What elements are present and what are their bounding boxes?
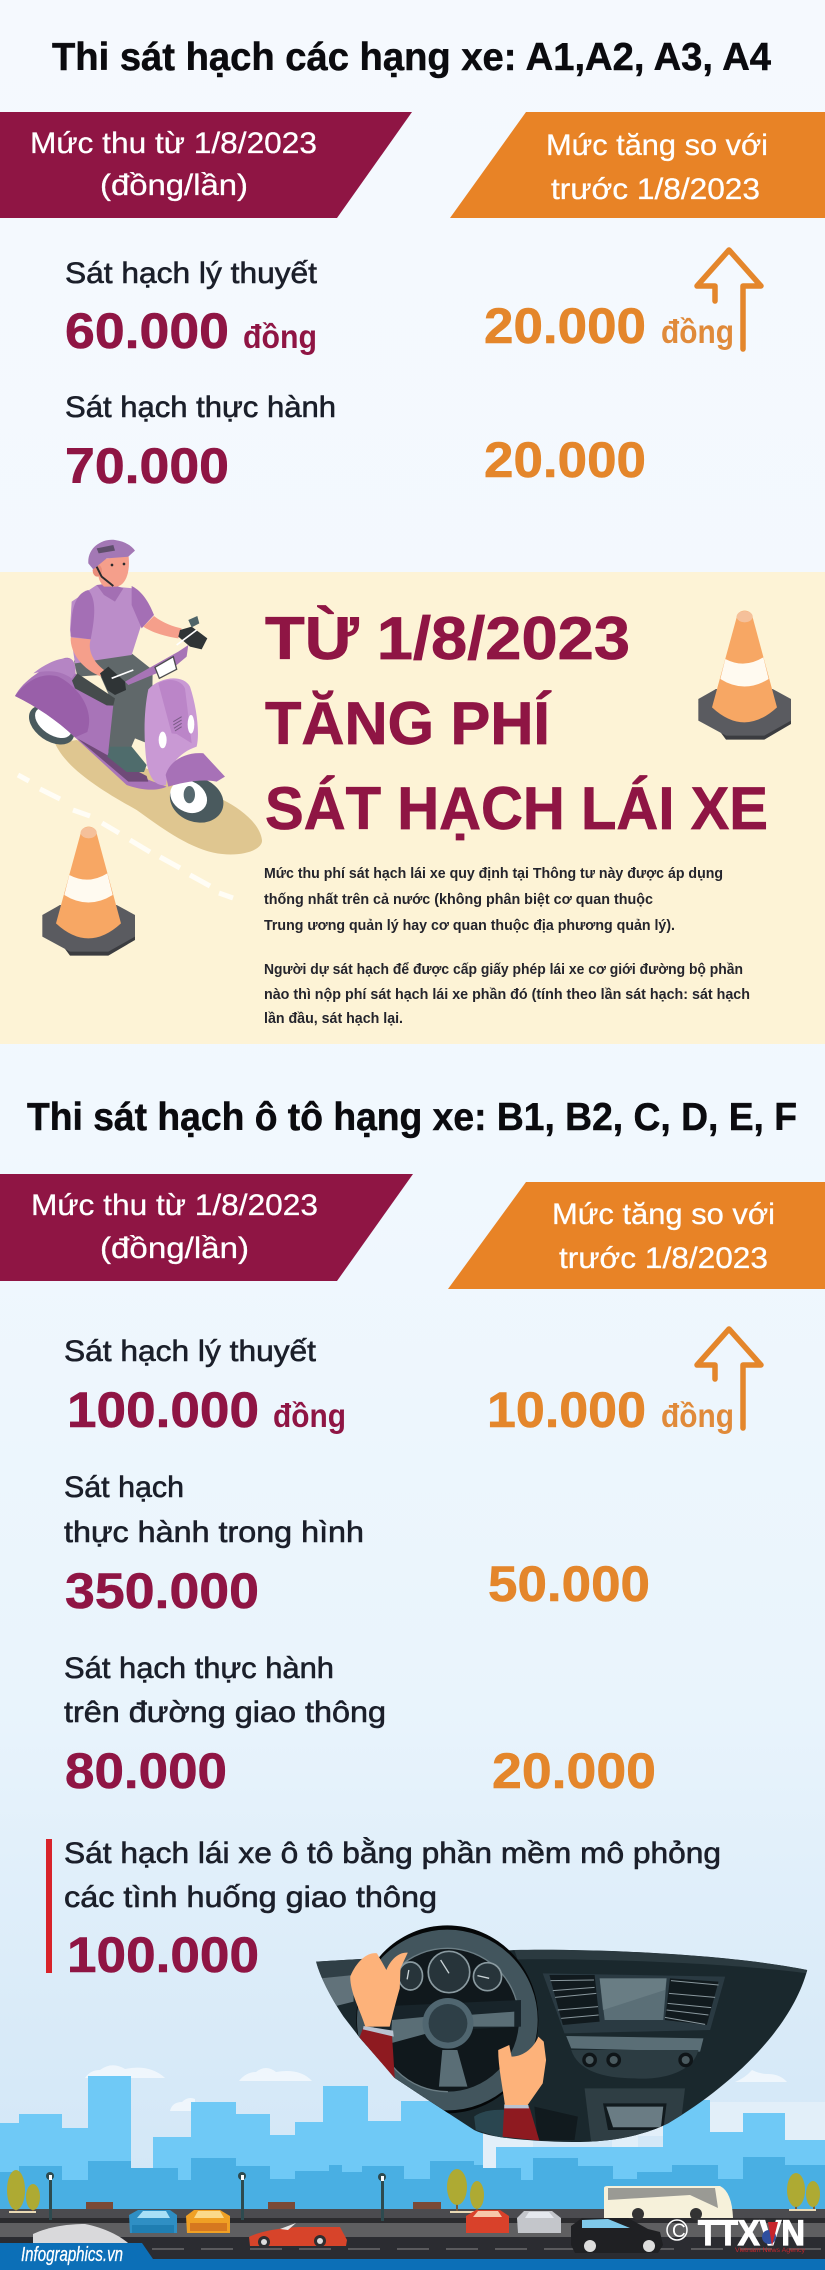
right arm and hand xyxy=(498,2037,546,2141)
headline: from 1/8/2023 raise driving test fee: TĂNG PHÍ xyxy=(265,690,551,757)
text block: fee note: lần đầu, sát hạch lại. xyxy=(264,1010,403,1027)
headline: from 1/8/2023 raise driving test fee xyxy=(265,605,768,842)
badge: infographics.vn: Infographics.vn xyxy=(21,2244,123,2266)
left arm and hand xyxy=(350,1953,408,2078)
illustration: cars xyxy=(33,2186,733,2253)
head and helmet xyxy=(88,540,135,587)
icon: traffic cone left xyxy=(42,827,135,956)
illustration: road dashes xyxy=(18,775,233,898)
label: on-road practical exam: trên đường giao thông xyxy=(64,1696,386,1729)
tree trunks xyxy=(15,2202,815,2213)
text block: fee note: nào thì nộp phí sát hạch lái xe phần đó (tính theo lần sát hạch: sát hạch xyxy=(264,986,750,1003)
lights xyxy=(159,715,194,748)
light blue buildings xyxy=(0,2076,825,2215)
label: in-yard practical exam xyxy=(64,1471,364,1549)
illustration: city skyline xyxy=(0,2065,825,2215)
illustration: street with trees and lamps xyxy=(0,2169,825,2270)
headline: from 1/8/2023 raise driving test fee: SÁT HẠCH LÁI XE xyxy=(265,775,768,842)
value: 100.000 dong: đồng xyxy=(273,1397,346,1434)
shadow xyxy=(55,740,262,854)
increase: 20.000 dong xyxy=(484,298,734,354)
black SUV xyxy=(571,2218,663,2253)
text block: fee note: Người dự sát hạch để được cấp giấy phép lái xe cơ giới đường bộ phần xyxy=(264,961,743,978)
yellow car xyxy=(186,2210,230,2233)
increase: 20.000: 20.000 xyxy=(492,1743,656,1799)
gauge needles xyxy=(407,1960,489,1979)
value: 100.000: 100.000 xyxy=(67,1927,259,1983)
value: 80.000: 80.000 xyxy=(65,1743,227,1799)
text block: fee note: thống nhất trên cả nước (không phân biệt cơ quan thuộc xyxy=(264,891,653,908)
banner: fee from 1/8/2023 xyxy=(0,1174,413,1281)
front shield xyxy=(145,678,198,785)
lane marks xyxy=(152,2248,825,2250)
mid blue buildings xyxy=(0,2157,825,2215)
scooter body xyxy=(15,658,167,790)
label: simulator exam: các tình huống giao thông xyxy=(64,1881,437,1914)
value: 70.000: 70.000 xyxy=(65,438,229,494)
label: in-yard practical exam: thực hành trong hình xyxy=(64,1516,364,1549)
text block: fee note xyxy=(264,865,750,1027)
value: 350.000: 350.000 xyxy=(65,1563,259,1619)
heading: B1 B2 C D E F: Thi sát hạch ô tô hạng xe: B1, B2, C, D, E, F xyxy=(27,1096,797,1139)
icon: up arrow xyxy=(697,250,761,349)
trees xyxy=(7,2169,820,2210)
illustration: rider on purple scooter xyxy=(15,540,262,854)
value: 60.000 dong: 60.000 xyxy=(65,303,229,359)
increase: 10.000 dong: 10.000 xyxy=(487,1382,646,1438)
icon: traffic cone right xyxy=(698,611,791,740)
banner: increase compared with before: trước 1/8/2023 xyxy=(551,173,760,206)
banner: fee from 1/8/2023 xyxy=(0,112,412,218)
rear wheel xyxy=(22,697,82,753)
white bus xyxy=(604,2186,733,2220)
logo: TTXVN copyright: C xyxy=(672,2221,686,2242)
label: simulator exam xyxy=(64,1837,721,1914)
badge: infographics.vn xyxy=(0,2243,825,2270)
increase: 20.000: 20.000 xyxy=(484,432,646,488)
icon: up arrow xyxy=(697,1329,761,1428)
banner: fee from 1/8/2023: Mức thu từ 1/8/2023 xyxy=(31,1189,318,1222)
text block: fee note: Mức thu phí sát hạch lái xe quy định tại Thông tư này được áp dụng xyxy=(264,865,723,882)
logo: TTXVN copyright: Vietnam News Agency xyxy=(735,2247,806,2254)
headline: from 1/8/2023 raise driving test fee: TỪ 1/8/2023 xyxy=(265,605,630,672)
label: practical exam: Sát hạch thực hành xyxy=(65,391,336,424)
steering wheel xyxy=(356,1925,538,2113)
accent bar xyxy=(46,1839,52,1973)
increase: 50.000: 50.000 xyxy=(488,1556,650,1612)
logo: TTXVN copyright: TTXVN xyxy=(698,2214,805,2253)
handlebar and gloves xyxy=(100,616,207,695)
orange red car xyxy=(466,2210,509,2233)
road bands xyxy=(0,2209,825,2270)
blue car xyxy=(129,2210,177,2233)
value: 100.000 dong xyxy=(67,1382,346,1438)
red convertible xyxy=(249,2223,347,2248)
shirt and arms xyxy=(70,583,182,677)
increase: 20.000 dong: đồng xyxy=(661,313,734,350)
legs xyxy=(74,653,153,772)
value: 60.000 dong: đồng xyxy=(243,318,317,355)
dashboard details xyxy=(316,1950,807,2143)
lamp lights xyxy=(49,2175,384,2181)
heading: A1 A2 A3 A4: Thi sát hạch các hạng xe: A1,A2, A3, A4 xyxy=(52,36,771,79)
front fender and wheel xyxy=(163,753,230,830)
dashboard shell xyxy=(316,1950,807,2142)
label: theory exam: Sát hạch lý thuyết xyxy=(64,1335,316,1368)
banner: increase compared with before: trước 1/8/2023 xyxy=(559,1242,768,1275)
banner: fee from 1/8/2023: Mức thu từ 1/8/2023 xyxy=(30,127,317,160)
label: theory exam: Sát hạch lý thuyết xyxy=(65,257,317,290)
increase: 10.000 dong: đồng xyxy=(661,1397,734,1434)
label: in-yard practical exam: Sát hạch xyxy=(64,1471,184,1504)
value: 100.000 dong: 100.000 xyxy=(67,1382,259,1438)
illustration: dashboard and steering wheel xyxy=(316,1925,807,2143)
label: on-road practical exam xyxy=(64,1652,386,1729)
banner: increase compared with before: Mức tăng so với xyxy=(552,1198,775,1231)
benches xyxy=(86,2202,441,2209)
panel: headline and note xyxy=(0,572,825,1044)
pale back buildings xyxy=(483,2102,825,2170)
white car xyxy=(33,2224,128,2243)
section: A-class motorcycle fees xyxy=(0,36,825,494)
label: on-road practical exam: Sát hạch thực hành xyxy=(64,1652,334,1685)
increase: 20.000 dong: 20.000 xyxy=(484,298,646,354)
seat xyxy=(72,673,115,706)
value: 60.000 dong xyxy=(65,303,317,359)
banner: increase compared with before xyxy=(450,112,825,218)
banner: fee from 1/8/2023: (đồng/lần) xyxy=(100,1232,249,1265)
banner: fee from 1/8/2023: (đồng/lần) xyxy=(100,169,248,202)
lamps xyxy=(46,2172,386,2221)
increase: 10.000 dong xyxy=(487,1382,734,1438)
banner: increase compared with before: Mức tăng so với xyxy=(546,129,768,162)
tree planters xyxy=(9,2209,816,2213)
text block: fee note: Trung ương quản lý hay cơ quan thuộc địa phương quản lý). xyxy=(264,917,675,934)
silver car xyxy=(517,2211,561,2233)
section: car fees xyxy=(0,1096,825,1983)
gauges xyxy=(398,1951,502,1993)
label: simulator exam: Sát hạch lái xe ô tô bằng phần mềm mô phỏng xyxy=(64,1837,721,1870)
clouds xyxy=(85,2065,787,2111)
banner: increase compared with before xyxy=(448,1182,825,1289)
